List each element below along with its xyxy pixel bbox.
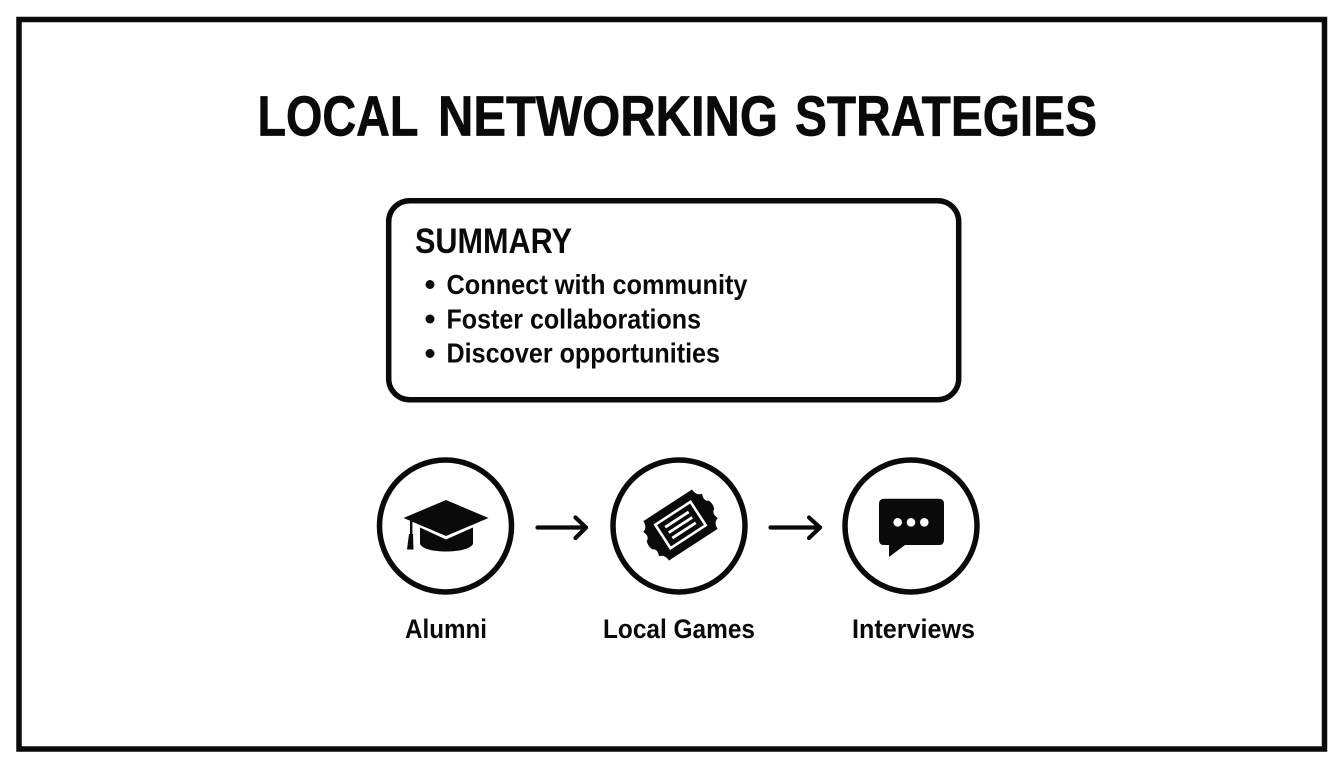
icon: chat bubble (879, 499, 944, 557)
bullet: foster collaborations: Foster collaborations (446, 304, 701, 334)
circle: local games (613, 460, 745, 592)
label: local games: Local Games (603, 614, 755, 644)
circle: alumni (380, 460, 512, 592)
step: alumni (380, 460, 512, 644)
step: interviews (845, 460, 977, 644)
arrow: alumni to local games (538, 518, 586, 538)
title (258, 84, 1097, 148)
label: interviews: Interviews (852, 614, 975, 644)
icon: ticket (636, 485, 725, 565)
title: NETWORKING (438, 84, 778, 148)
step: local games (603, 460, 755, 644)
summary heading: SUMMARY (415, 222, 572, 261)
title: LOCAL (258, 84, 418, 148)
label: alumni: Alumni (405, 614, 487, 644)
circle: interviews (845, 460, 977, 592)
bullet: connect with community: Connect with community (446, 269, 748, 300)
title: STRATEGIES (795, 84, 1097, 148)
summary list (426, 269, 748, 368)
arrow: local games to interviews (770, 518, 820, 538)
bullet: discover opportunities: Discover opportunities (446, 338, 720, 368)
panel: summary (389, 201, 959, 400)
summary box outline (389, 201, 959, 400)
icon: graduation cap (404, 500, 488, 552)
